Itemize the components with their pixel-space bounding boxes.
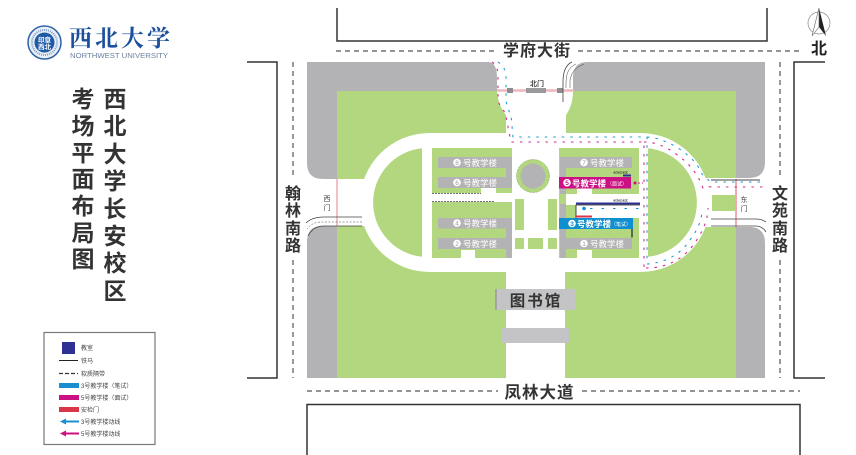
building 3: written test: 3 [570, 221, 574, 228]
green block: south west [432, 202, 512, 258]
street boundaries [247, 8, 825, 455]
green block: north west [432, 148, 512, 193]
gray building spines [506, 157, 566, 258]
building 6 [438, 177, 512, 188]
title column: campus name: 西北大学长安校区 [104, 86, 126, 304]
road: ring [360, 133, 710, 272]
logo: Northwest University: 西北大学 [69, 26, 170, 51]
inner lawn east [648, 148, 697, 257]
building 5: interview: （面试） [607, 180, 627, 188]
logo: Northwest University: NORTHWEST UNIVERSITY [70, 51, 168, 60]
library [496, 289, 575, 310]
title column: layout map: 考场平面布局图 [72, 86, 94, 272]
approach to building 3: 考场候考区 [613, 198, 628, 202]
east gate: 东门 [740, 195, 748, 213]
north gate line [497, 79, 574, 93]
building 1: 号教学楼 [590, 239, 625, 249]
building 2 [438, 238, 512, 249]
building 5: interview [559, 177, 631, 188]
street label: north: 学府大街 [503, 41, 571, 60]
west gate: 西门 [324, 195, 330, 212]
building 7: 7 [582, 160, 586, 167]
gray corner: north east [573, 62, 765, 178]
legend: 5号教学楼（面试） [81, 394, 132, 402]
approach to building 3 [576, 198, 640, 238]
barrier lines at gates [306, 62, 766, 236]
street label: east: 文苑南路 [772, 184, 788, 255]
block notches [461, 188, 640, 258]
building 1: 1 [582, 241, 586, 248]
inner lawn west [373, 148, 422, 257]
road: west entrance [337, 179, 367, 226]
west gate [324, 179, 337, 226]
legend: 3号教学楼动线 [81, 418, 120, 426]
east entrance island [712, 195, 736, 211]
compass: 北 [811, 40, 827, 58]
building 8: 8 [455, 160, 459, 167]
building 4: 号教学楼 [463, 218, 498, 228]
building 3: written test: （笔试） [611, 221, 631, 228]
building 4 [438, 218, 512, 228]
building 6: 6 [455, 180, 459, 187]
building 8 [438, 157, 512, 168]
library annex [502, 328, 569, 343]
library: 图书馆 [510, 291, 562, 310]
building 7: 号教学楼 [590, 158, 625, 168]
road: south axis [506, 268, 565, 378]
road: north gate [497, 89, 573, 140]
central lawns [515, 199, 557, 249]
approach to building 5 [613, 170, 643, 184]
building 7 [560, 157, 632, 168]
legend: 5号教学楼动线 [81, 430, 120, 438]
north gate line: 北门 [530, 79, 544, 88]
route to building 3 [498, 62, 764, 264]
route to building 5 [492, 62, 764, 268]
approach to building 5: 考场候考区 [613, 170, 628, 174]
legend: 软质隔带 [81, 370, 105, 378]
gray corner: south west [307, 226, 337, 378]
building 8: 号教学楼 [463, 158, 498, 168]
building 4: 4 [455, 220, 459, 228]
legend: 安检门 [81, 406, 99, 414]
legend: 3号教学楼（笔试） [81, 382, 132, 390]
logo: Northwest University: 印章 [38, 35, 52, 44]
green block: east [559, 148, 639, 258]
building 1 [560, 238, 632, 249]
campus map [306, 62, 766, 378]
east gate [736, 179, 748, 227]
legend [44, 332, 155, 444]
building 6: 号教学楼 [463, 178, 498, 188]
building 3: written test [559, 218, 633, 229]
road: east entrance [704, 178, 736, 227]
logo: Northwest University: 西北 [38, 42, 52, 51]
gray corner: south east [736, 227, 765, 378]
legend: 教室 [81, 344, 93, 352]
building 3: written test: 号教学楼 [577, 219, 612, 229]
building 2: 号教学楼 [463, 239, 498, 249]
street label: south: 凤林大道 [504, 382, 574, 402]
legend: 铁马 [81, 357, 93, 365]
logo: Northwest University [28, 26, 170, 60]
barrier dashes: west lawn [432, 160, 550, 202]
street label: west: 翰林南路 [285, 184, 301, 255]
building 2: 2 [455, 241, 459, 248]
building 5: interview: 号教学楼 [572, 178, 607, 188]
gray corner: north west [307, 62, 497, 179]
central circle [516, 160, 550, 192]
building 5: interview: 5 [565, 180, 569, 187]
compass [808, 8, 830, 58]
green ground [337, 90, 736, 378]
